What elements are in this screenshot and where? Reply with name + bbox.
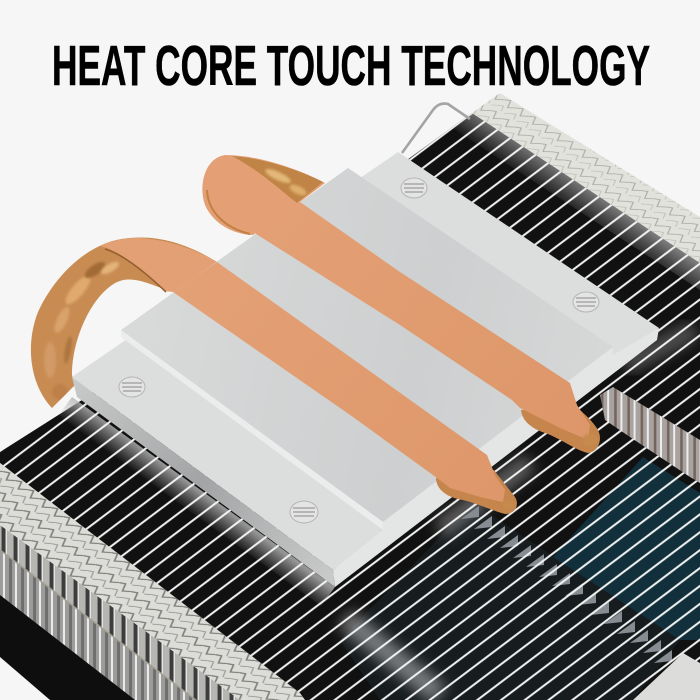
fin teeth front — [0, 525, 240, 700]
teal reflection in fin gaps — [553, 457, 700, 640]
rear flat heat pipe — [253, 202, 600, 453]
wavy fin band upper right — [472, 93, 700, 263]
glow along plate edge — [58, 397, 335, 606]
corner base plate bottom right — [633, 653, 700, 700]
rear tip highlight — [582, 434, 598, 446]
base plate — [72, 152, 659, 587]
rear bend burnished surface — [232, 156, 323, 203]
raised slab side edge — [121, 330, 383, 530]
glow along upper band — [452, 113, 700, 290]
reflection band lower — [345, 618, 440, 695]
screw hole right — [573, 292, 599, 312]
dark base below the fins — [0, 590, 140, 700]
reflection near pipe tips — [440, 462, 530, 530]
rear pipe strip — [253, 202, 590, 440]
bend highlights — [44, 259, 121, 400]
front tip highlight — [502, 500, 514, 510]
raised slab top — [121, 168, 613, 522]
bend seam — [105, 249, 166, 292]
lower side fins with rod — [0, 545, 200, 700]
front pipe strip — [173, 262, 505, 502]
front heat pipe bend — [31, 237, 217, 408]
wavy fin band lower left — [0, 463, 305, 700]
screw hole top — [401, 178, 427, 198]
lower slab top — [72, 152, 659, 570]
stair triangles — [461, 506, 672, 663]
rear heat pipe bend — [202, 155, 325, 235]
rear pipe crimped rim — [521, 408, 600, 453]
flattened top of bend — [100, 238, 217, 292]
grey fin block on right — [600, 387, 700, 483]
front flat heat pipe — [173, 262, 517, 514]
lower slab side face — [72, 377, 335, 587]
screw hole left — [119, 377, 145, 397]
plate front face — [333, 328, 659, 587]
lower right fin gap tint — [340, 503, 680, 700]
reflection on upper right fins — [625, 330, 695, 365]
wire clip — [402, 104, 470, 153]
screw hole bottom — [290, 501, 318, 523]
front pipe crimped rim — [436, 470, 517, 514]
